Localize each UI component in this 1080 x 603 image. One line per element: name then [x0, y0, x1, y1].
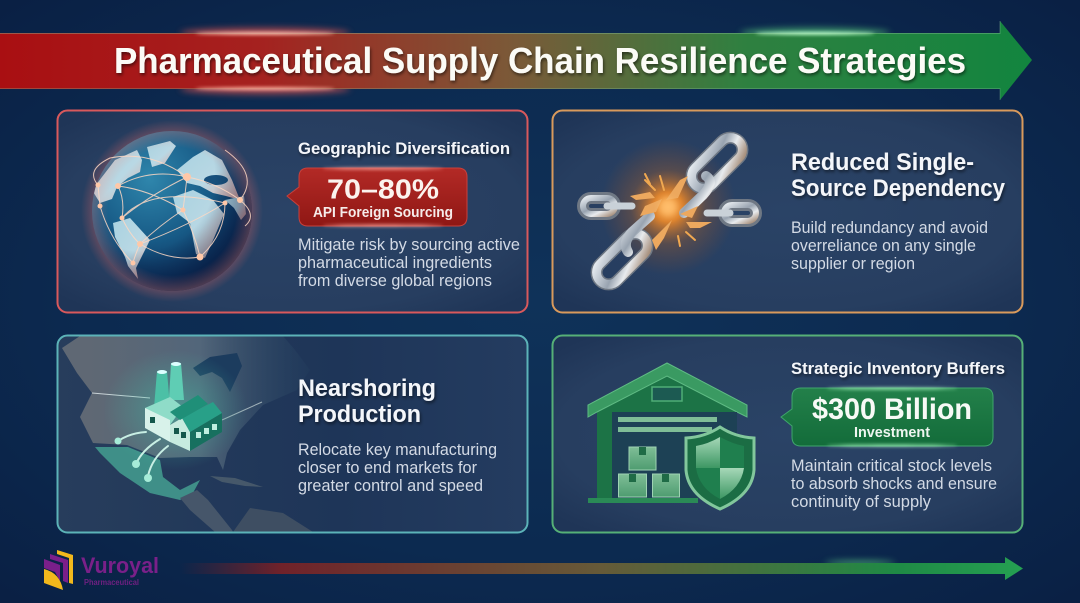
heading: Production — [298, 401, 421, 428]
heading: Reduced Single- — [791, 149, 974, 176]
icon: broken chain — [583, 133, 756, 289]
logo: Vuroyal Pharmaceutical: Vuroyal — [81, 553, 159, 578]
description: Mitigate risk by sourcing active — [298, 236, 520, 254]
heading: Source Dependency — [791, 175, 1006, 202]
heading: Nearshoring — [298, 375, 436, 402]
panel: strategic inventory buffers — [552, 336, 1022, 532]
logo: Vuroyal Pharmaceutical: Pharmaceutical — [84, 578, 139, 587]
callout: 70–80%: 70–80% — [327, 174, 439, 204]
description: greater control and speed — [298, 477, 483, 495]
callout: $300 Billion: $300 Billion — [812, 393, 972, 426]
panel: single-source dependency — [552, 110, 1022, 312]
logo: Vuroyal Pharmaceutical — [44, 550, 159, 590]
header arrow banner — [0, 21, 1032, 100]
description: Build redundancy and avoid — [791, 219, 988, 237]
network lines — [94, 150, 250, 263]
icon: globe with network — [81, 120, 263, 302]
callout: $300 Billion: Investment — [854, 425, 930, 441]
title: Pharmaceutical Supply Chain Resilience Strategies — [114, 40, 966, 81]
heading: Strategic Inventory Buffers — [791, 359, 1005, 378]
icon: warehouse with shield — [588, 363, 754, 509]
description: continuity of supply — [791, 493, 932, 511]
map of North America — [62, 336, 313, 532]
bottom progress arrow — [180, 557, 1023, 580]
description: closer to end markets for — [298, 459, 477, 477]
description: overreliance on any single — [791, 237, 976, 255]
logo mark — [44, 550, 73, 590]
callout: 70–80%: API Foreign Sourcing — [313, 204, 453, 221]
icon: factory with routes — [114, 362, 222, 482]
description: to absorb shocks and ensure — [791, 475, 997, 493]
panel: nearshoring production — [58, 336, 528, 532]
description: pharmaceutical ingredients — [298, 254, 492, 272]
callout: 70–80% — [287, 168, 467, 226]
description: supplier or region — [791, 255, 915, 273]
description: Maintain critical stock levels — [791, 457, 992, 475]
icon: shield — [686, 427, 754, 509]
description: from diverse global regions — [298, 272, 492, 290]
panel: geographic diversification — [58, 110, 528, 312]
callout: $300 Billion — [781, 388, 993, 446]
description: Relocate key manufacturing — [298, 441, 497, 459]
heading: Geographic Diversification — [298, 139, 510, 158]
